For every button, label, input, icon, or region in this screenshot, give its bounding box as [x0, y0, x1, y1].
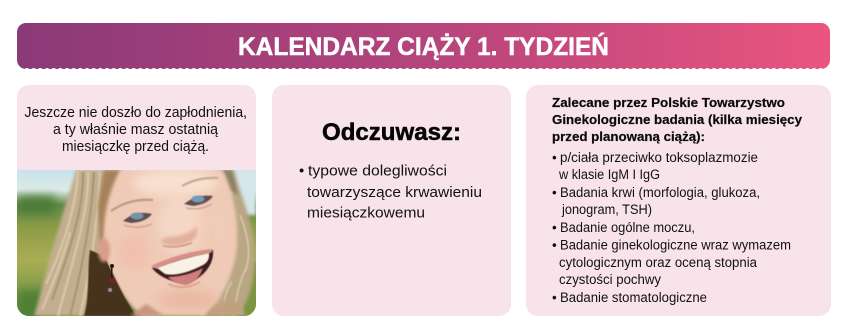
hair right: [200, 170, 255, 316]
nose: [160, 226, 197, 246]
tests heading: Zalecane przez Polskie Towarzystwo: [552, 95, 785, 110]
intro text: Jeszcze nie doszło do zapłodnienia,: [24, 105, 247, 121]
title banner: [17, 23, 830, 72]
tests list: •: [552, 290, 557, 305]
eyes: [123, 213, 152, 223]
tests list: p/ciała przeciwko toksoplazmozie: [560, 150, 758, 165]
tests list: cytologicznym oraz oceną stopnia: [559, 255, 757, 270]
tests list: •: [552, 150, 557, 165]
tests list: •: [552, 220, 557, 235]
tests heading: przed planowaną ciążą):: [552, 129, 705, 144]
intro text: miesiączkę przed ciążą.: [62, 139, 209, 155]
tests list: Badania krwi (morfologia, glukoza,: [560, 185, 760, 200]
panel: intro with photo: [17, 85, 258, 320]
tests heading: Ginekologiczne badania (kilka miesięcy: [552, 112, 803, 127]
heading: Odczuwasz:: [322, 119, 461, 146]
tests list: Badanie ogólne moczu,: [560, 220, 695, 235]
earring: [108, 264, 115, 292]
ear: [98, 238, 110, 262]
neck shadow: [130, 304, 165, 316]
face: [104, 170, 237, 316]
tests list: czystości pochwy: [559, 272, 661, 287]
lower lip shadow: [168, 282, 200, 287]
tests list: •: [552, 185, 557, 200]
symptoms list: •: [299, 162, 304, 180]
panel: recommended tests: [526, 85, 831, 316]
symptoms list: [299, 162, 482, 222]
tests list: Badanie stomatologiczne: [560, 290, 707, 305]
tests list: jonogram, TSH): [561, 202, 652, 217]
intro text: [24, 105, 247, 155]
tests list: •: [552, 238, 557, 252]
panel: Odczuwasz: [272, 85, 511, 316]
tests list: w klasie IgM I IgG: [558, 167, 660, 182]
symptoms list: typowe dolegliwości: [308, 162, 447, 180]
hair left: [34, 170, 128, 316]
tests list: [552, 150, 791, 305]
photo: smiling woman: [17, 169, 258, 320]
dark hair behind ear: [84, 250, 136, 316]
intro text: a ty właśnie masz ostatnią: [53, 122, 219, 138]
symptoms list: miesiączkowemu: [307, 204, 425, 222]
eyebrows: [111, 200, 153, 211]
mouth: [152, 250, 213, 283]
title: KALENDARZ CIĄŻY 1. TYDZIEŃ: [238, 32, 609, 61]
curl of hair bottom right: [205, 300, 246, 316]
symptoms list: towarzyszące krwawieniu: [307, 184, 482, 201]
tests heading: [552, 95, 803, 144]
tests list: Badanie ginekologiczne wraz wymazem: [560, 238, 791, 252]
hair strand over cheek: [230, 192, 232, 194]
